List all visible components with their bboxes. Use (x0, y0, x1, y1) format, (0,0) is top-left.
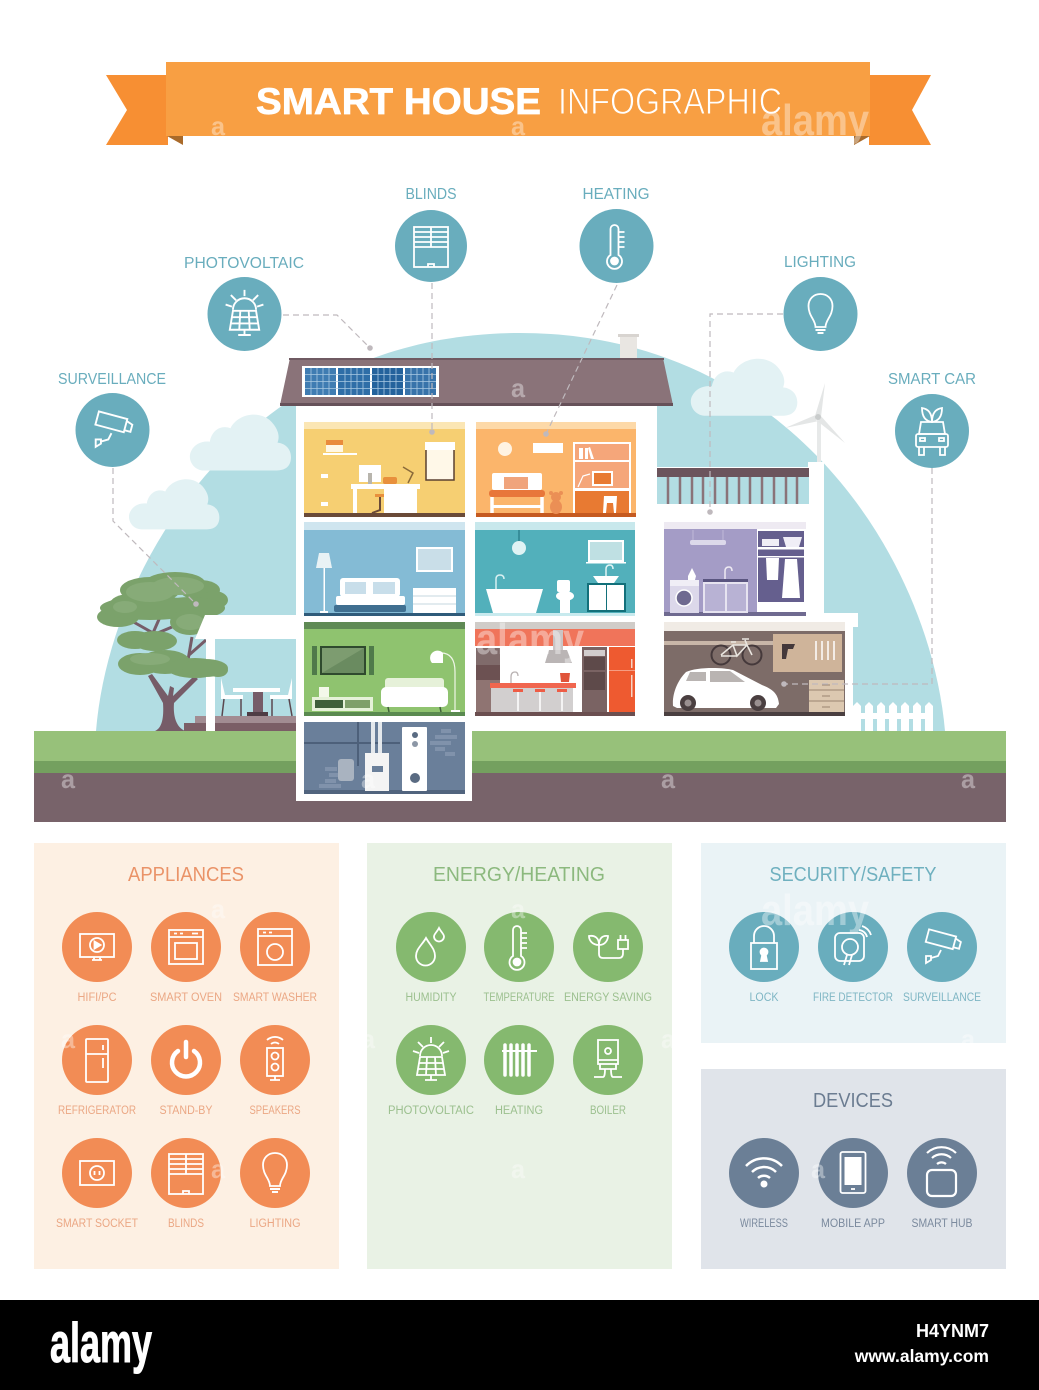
labels: devices: MOBILE APP (821, 1218, 885, 1230)
teddy bear (549, 491, 563, 514)
house (280, 334, 858, 801)
callout: blinds (395, 186, 467, 282)
white house body (296, 405, 858, 801)
callout: photovoltaic (184, 255, 304, 351)
labels: energy: ENERGY SAVING (564, 992, 652, 1004)
pegboard with tools (773, 634, 842, 672)
stock photo watermarks: a (61, 764, 76, 794)
tree upper canopy (97, 572, 228, 635)
connector lines (113, 283, 932, 684)
room: living room (304, 622, 465, 716)
labels: appliances: SMART OVEN (150, 992, 222, 1004)
solar panels (302, 366, 439, 397)
wind turbine (785, 383, 845, 469)
stock photo watermarks: a (661, 764, 676, 794)
panel: energy and heating (367, 843, 672, 1269)
stock photo watermarks: a (361, 1024, 376, 1054)
icon row: security (729, 912, 977, 982)
stock photo watermarks: a (511, 373, 526, 403)
stock photo watermarks: a (211, 894, 226, 924)
callout: photovoltaic: PHOTOVOLTAIC (184, 255, 304, 272)
callout: surveillance: SURVEILLANCE (58, 371, 166, 388)
panel: security and safety (701, 843, 1006, 1043)
labels: devices (740, 1218, 973, 1230)
labels: energy: HEATING (495, 1105, 543, 1117)
labels: appliances: LIGHTING (250, 1218, 301, 1230)
title text light: INFOGRAPHIC (558, 81, 782, 122)
ground (34, 731, 1006, 822)
room: office (304, 422, 465, 517)
icon grid: energy (396, 912, 643, 1095)
stock photo watermarks: a (361, 764, 376, 794)
labels: appliances (56, 992, 317, 1230)
stock photo watermarks: a (811, 1154, 826, 1184)
labels: appliances: SPEAKERS (250, 1105, 301, 1117)
heading: appliances: APPLIANCES (128, 863, 244, 886)
car (673, 668, 779, 711)
footer logo: alamy (50, 1311, 152, 1374)
smart blinds window (425, 442, 455, 480)
stock photo watermarks: a (511, 111, 526, 141)
icon row: devices (729, 1138, 977, 1208)
labels: appliances: SMART SOCKET (56, 1218, 138, 1230)
stock photo watermarks: a (61, 1024, 76, 1054)
labels: security: FIRE DETECTOR (813, 992, 893, 1004)
stock photo watermarks: a (661, 1024, 676, 1054)
title text: SMART HOUSE (256, 81, 541, 122)
title banner (106, 62, 931, 145)
stock photo watermarks: a (961, 1024, 976, 1054)
labels: devices: WIRELESS (740, 1218, 788, 1230)
labels: appliances: HIFI/PC (78, 992, 116, 1004)
callout: blinds: BLINDS (406, 186, 456, 203)
panel: devices (701, 1069, 1006, 1269)
stock photo watermarks: alamy (476, 615, 584, 664)
room: basement (304, 722, 465, 794)
labels: energy: HUMIDITY (406, 992, 457, 1004)
bicycle (712, 639, 762, 664)
stock photo watermarks: alamy (761, 886, 869, 935)
callout: heating: HEATING (582, 186, 650, 203)
footer bar (0, 1300, 1039, 1390)
sky dome (96, 333, 945, 731)
labels: energy: TEMPERATURE (484, 992, 555, 1004)
stock photo watermarks: a (511, 894, 526, 924)
labels: appliances: REFRIGERATOR (58, 1105, 136, 1117)
callout: heating (580, 186, 654, 283)
callout: smart car: SMART CAR (888, 371, 976, 388)
labels: appliances: BLINDS (168, 1218, 204, 1230)
site address: www.alamy.com (854, 1346, 989, 1366)
panel: appliances (34, 843, 339, 1269)
tree lower canopy (117, 631, 223, 678)
stock photo watermarks: a (961, 764, 976, 794)
balcony railing (657, 468, 809, 504)
labels: devices: SMART HUB (912, 1218, 973, 1230)
room: garage (664, 622, 845, 716)
labels: energy: BOILER (590, 1105, 626, 1117)
labels: energy (388, 992, 652, 1117)
television (312, 646, 374, 675)
labels: appliances: STAND-BY (160, 1105, 213, 1117)
patio (182, 615, 297, 731)
heading: energy heating: ENERGY/HEATING (433, 863, 605, 886)
labels: security: SURVEILLANCE (903, 992, 981, 1004)
chimney (618, 334, 639, 358)
patio table and chairs (221, 678, 292, 716)
labels: energy: PHOTOVOLTAIC (388, 1105, 474, 1117)
tree (97, 572, 228, 731)
callout: lighting: LIGHTING (784, 254, 856, 271)
labels: security (750, 992, 981, 1004)
heading: security safety: SECURITY/SAFETY (770, 863, 937, 886)
callout: lighting (784, 254, 858, 351)
room: main bedroom (304, 522, 465, 616)
room: bathroom (475, 522, 635, 616)
stock photo watermarks: a (511, 1154, 526, 1184)
room: laundry (664, 522, 806, 616)
connector dots (193, 345, 787, 687)
stock photo watermarks: a (211, 111, 226, 141)
stock photo watermarks (61, 96, 976, 1184)
image id: H4YNM7 (916, 1321, 989, 1341)
stock photo watermarks: alamy (761, 96, 869, 145)
callout: surveillance (58, 371, 166, 467)
stock photo watermarks: a (211, 1154, 226, 1184)
labels: security: LOCK (750, 992, 779, 1004)
fence (853, 702, 933, 731)
room: child bedroom (476, 422, 636, 517)
icon grid: appliances (62, 912, 310, 1208)
clouds (129, 359, 797, 529)
room: kitchen (475, 622, 635, 716)
heading: devices: DEVICES (813, 1089, 893, 1112)
foliage over patio post (182, 659, 228, 677)
callout: smart car (888, 371, 976, 468)
roof (280, 358, 673, 406)
labels: appliances: SMART WASHER (233, 992, 317, 1004)
tree trunk and branches (130, 617, 206, 731)
